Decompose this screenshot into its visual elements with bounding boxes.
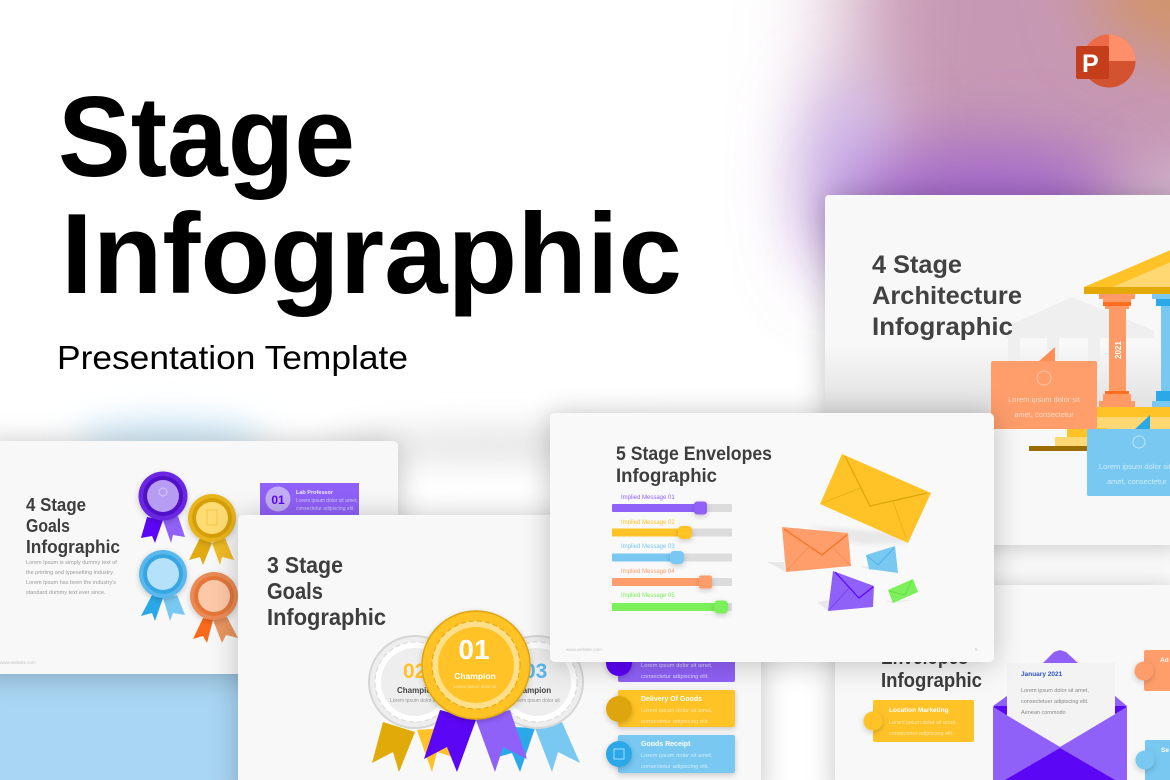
- panel: 3 stage goals slide: [238, 515, 761, 780]
- temple: blue column: [1152, 294, 1170, 407]
- card: purple: Lorem ipsum dolor sit amet,: [641, 663, 713, 669]
- heading: architecture: 4 Stage: [872, 251, 962, 279]
- medal: 02 silver: [369, 636, 461, 772]
- envelope: shadows: [767, 526, 915, 611]
- temple: orange column 2021: 2021: [1114, 341, 1123, 359]
- subtitle: Presentation Template: [57, 339, 408, 376]
- card: delivery of goods: consectetur adipiscing elit.: [641, 719, 709, 725]
- heading: 3 stage goals: 3 Stage: [267, 552, 343, 578]
- slider: message 05: Implied Message 05: [621, 593, 675, 599]
- slider: message 02: [612, 520, 732, 539]
- envelope: green: [888, 579, 918, 603]
- card: orange: Ad: [1160, 657, 1169, 664]
- heading: 4 stage goals: Goals: [26, 516, 70, 536]
- medal: 03 silver: 03: [524, 660, 547, 683]
- card: delivery of goods: Lorem ipsum dolor sit amet,: [641, 708, 713, 714]
- medal: 03 silver: [491, 636, 583, 772]
- icon: PowerPoint logo: [1076, 34, 1136, 88]
- card: lab professor: consectetur adipiscing elit.: [296, 506, 355, 512]
- heading: 5 stage envelopes: Infographic: [616, 466, 717, 487]
- medal: 01 gold: [422, 611, 530, 772]
- envelope with letter: January 2021: [1021, 671, 1063, 678]
- ghost temple: [1006, 297, 1155, 378]
- card: goods receipt: Lorem ipsum dolor sit amet,: [641, 753, 713, 759]
- callout: orange: [991, 347, 1097, 429]
- card: lab professor: Lab Professor: [296, 490, 334, 496]
- envelope with letter: [993, 650, 1127, 780]
- body text: Lorem Ipsum has been the industry's: [26, 580, 116, 586]
- card: purple: [606, 650, 735, 682]
- card: blue: [1136, 740, 1170, 780]
- card: goods receipt: Goods Receipt: [641, 741, 691, 748]
- panel: 4 stage goals slide: www.website.com: [0, 660, 36, 665]
- main title: Stage: [58, 74, 355, 201]
- heading: envelopes: Infographic: [881, 670, 982, 692]
- callout: blue: Lorem ipsum dolor sit: [1099, 462, 1170, 471]
- medal: 01 gold: 01: [458, 634, 490, 665]
- medal: blue: [139, 550, 187, 621]
- card: lab professor: 01: [271, 493, 285, 507]
- card: blue: Se: [1161, 747, 1169, 754]
- card: purple: consectetur adipiscing elit.: [641, 674, 709, 680]
- slider: message 03: [612, 544, 732, 564]
- card: goods receipt: [606, 735, 735, 773]
- card: delivery of goods: Delivery Of Goods: [641, 696, 702, 703]
- medal: 02 silver: 02: [403, 660, 426, 683]
- medal: 03 silver: Lorem ipsum dolor sit: [512, 698, 560, 704]
- heading: envelopes: Envelopes: [881, 647, 968, 669]
- body text: [26, 560, 117, 596]
- medal: orange: [190, 572, 238, 643]
- medal: 01 gold: Champion: [454, 671, 496, 681]
- heading: 5 stage envelopes: 5 Stage Envelopes: [616, 444, 772, 465]
- body text: standard dummy text ever since.: [26, 590, 106, 596]
- envelope: yellow: [820, 454, 931, 543]
- slider: message 04: [612, 569, 732, 588]
- envelope: purple: [828, 571, 874, 611]
- slider: message 05: [612, 593, 732, 614]
- heading: architecture: [872, 251, 1022, 341]
- slider: message 02: Implied Message 02: [621, 520, 675, 526]
- panel: envelopes slide bottom right: [835, 585, 1170, 780]
- slider: message 03: Implied Message 03: [621, 544, 675, 550]
- heading: 3 stage goals: Infographic: [267, 604, 386, 630]
- medal: 01 gold: Lorem ipsum dolor sit: [453, 684, 497, 689]
- medal: 03 silver: Champion: [512, 686, 551, 695]
- card: delivery of goods: [606, 690, 735, 727]
- heading: 3 stage goals: Goals: [267, 578, 323, 604]
- medal: yellow: [188, 494, 236, 565]
- panel: 5 stage envelopes slide: [550, 413, 994, 662]
- main title: [58, 74, 682, 318]
- heading: 4 stage goals: 4 Stage: [26, 495, 86, 515]
- card: location marketing: Location Marketing: [889, 707, 949, 714]
- heading: architecture: Infographic: [872, 313, 1013, 341]
- callout: orange: amet, consectetur: [1014, 410, 1074, 419]
- panel: 4 stage architecture slide: [825, 195, 1170, 545]
- slider: message 04: Implied Message 04: [621, 569, 675, 575]
- callout: blue: [1087, 415, 1170, 496]
- card: location marketing: [864, 700, 974, 742]
- card: lab professor: [260, 483, 359, 517]
- medal: 02 silver: Champion: [397, 686, 436, 695]
- card: location marketing: Lorem ipsum dolor sit amet,: [889, 720, 957, 726]
- envelope: orange: [782, 527, 851, 572]
- heading: architecture: Architecture: [872, 282, 1022, 310]
- body text: Lorem Ipsum is simply dummy text of: [26, 560, 117, 566]
- card: orange: [1134, 650, 1170, 691]
- heading: envelopes: [881, 647, 982, 692]
- heading: 4 stage goals: [26, 495, 120, 557]
- blue block bottom left: [0, 672, 240, 780]
- envelope with letter: consectetuer adipiscing elit.: [1021, 699, 1089, 705]
- panel: 4 stage goals slide: [0, 441, 398, 674]
- card: location marketing: consectetur adipiscing elit.: [889, 731, 954, 737]
- slider: message 01: [612, 495, 732, 514]
- icon: PowerPoint logo: P: [1082, 50, 1099, 78]
- heading: 4 stage goals: Infographic: [26, 537, 120, 557]
- heading: 3 stage goals: [267, 552, 386, 630]
- envelope: blue: [866, 546, 898, 573]
- heading: 5 stage envelopes: [616, 444, 772, 487]
- callout: blue: amet, consectetur: [1107, 477, 1167, 486]
- main title: Infographic: [61, 191, 682, 318]
- body text: the printing and typesetting industry.: [26, 570, 114, 576]
- slider: message 01: Implied Message 01: [621, 495, 675, 501]
- medal: 02 silver: Lorem ipsum dolor sit: [390, 698, 438, 704]
- temple: platform and steps: [1029, 407, 1170, 451]
- temple: roof: [1084, 246, 1170, 294]
- panel: 5 stage envelopes slide: 5: [975, 647, 978, 652]
- envelope with letter: Lorem ipsum dolor sit amet,: [1021, 688, 1089, 694]
- envelope with letter: Aenean commodo: [1021, 710, 1066, 716]
- card: goods receipt: consectetur adipiscing elit.: [641, 764, 709, 770]
- panel: 5 stage envelopes slide: www.website.com: [566, 647, 602, 652]
- card: lab professor: Lorem ipsum dolor sit amet,: [296, 498, 358, 504]
- medal: purple: [138, 472, 188, 543]
- callout: orange: Lorem ipsum dolor sit: [1008, 395, 1081, 404]
- temple: orange column 2021: [1099, 294, 1135, 407]
